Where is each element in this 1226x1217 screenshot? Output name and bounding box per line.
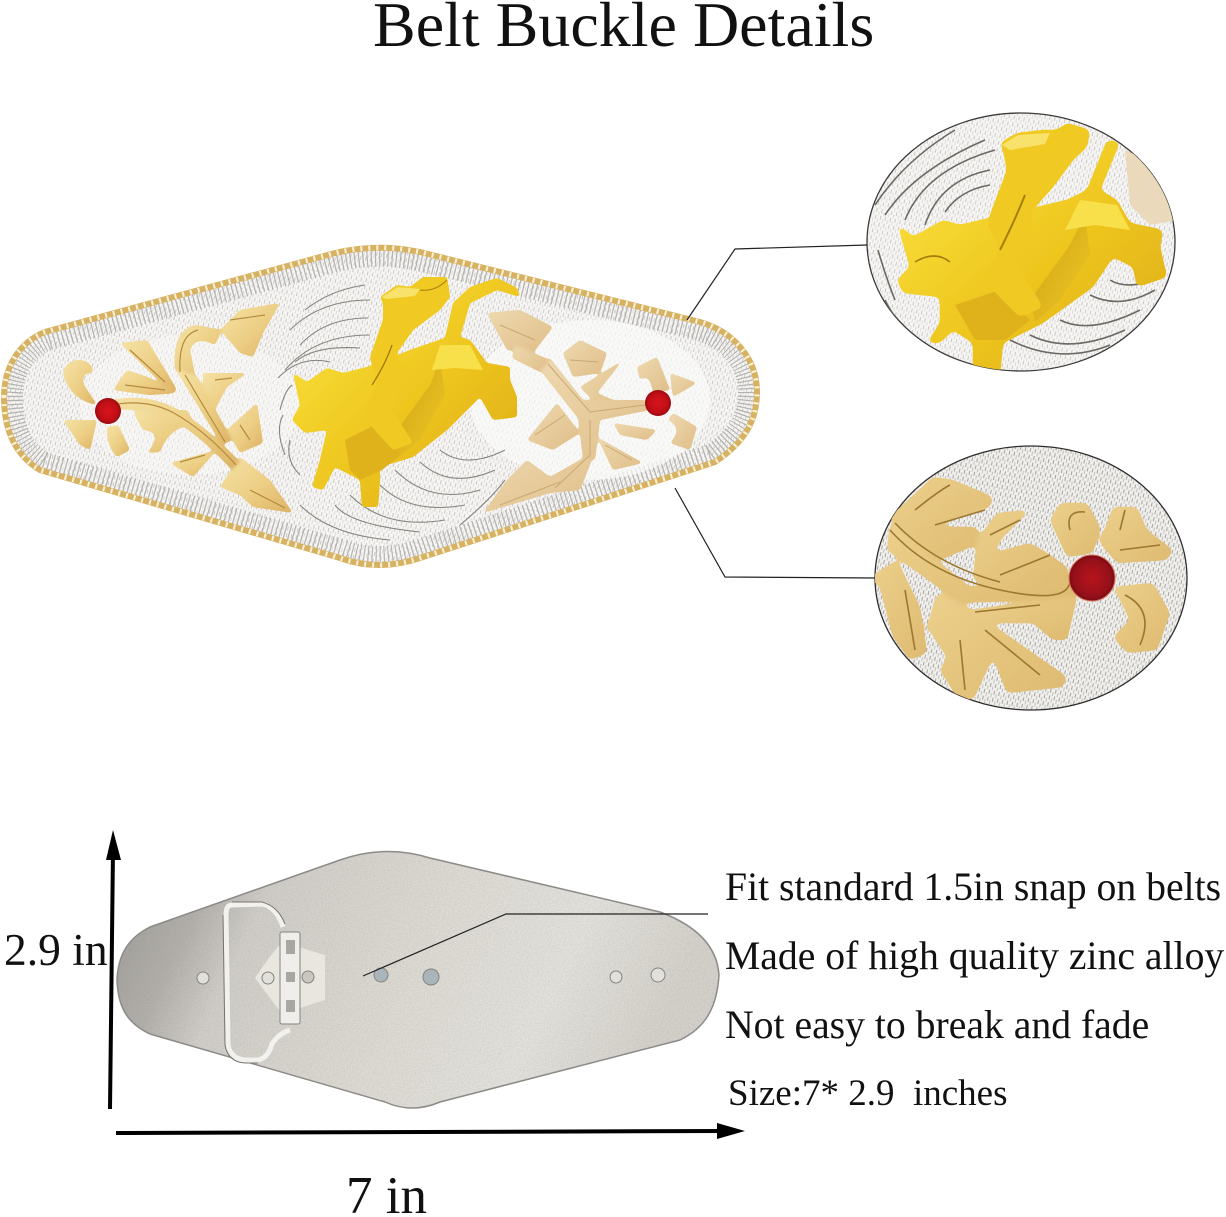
main buckle front [4,248,757,565]
rider [363,277,450,450]
callout lines [675,245,875,578]
detail circle: bull rider [867,113,1178,375]
feature: durability: Not easy to break and fade [725,1003,1149,1047]
gold bull [292,277,520,507]
feature: size: Size:7* 2.9 inches [728,1073,1008,1114]
zoomed rider [983,123,1090,317]
right scroll engraving [500,325,645,505]
rope border [4,248,757,565]
feature text block [725,865,1224,1114]
feature: fit: Fit standard 1.5in snap on belts [725,865,1221,909]
right rose scroll [483,310,697,513]
feature: material: Made of high quality zinc alloy [725,934,1224,978]
pointer line [363,914,708,976]
gem zoomed [1069,555,1115,601]
zoomed bull [897,140,1167,375]
arrow horizontal [116,1123,745,1139]
gem left [95,398,121,424]
buckle back [117,851,719,1108]
belt loop [226,904,290,1060]
hinge [280,932,300,1024]
height label: 2.9 in [4,924,108,975]
arrow vertical [106,830,121,1109]
back plate [117,851,719,1108]
detail circle: floral and gem [870,446,1187,710]
engraved swirls [278,285,505,540]
buckle plate [4,248,757,565]
gem right [645,390,671,416]
callout line upper [687,245,867,320]
studs [197,968,665,985]
callout line lower [675,488,875,578]
hinge bracket [255,942,325,1014]
left scroll engraving [100,315,285,508]
left gold scroll [63,303,293,513]
